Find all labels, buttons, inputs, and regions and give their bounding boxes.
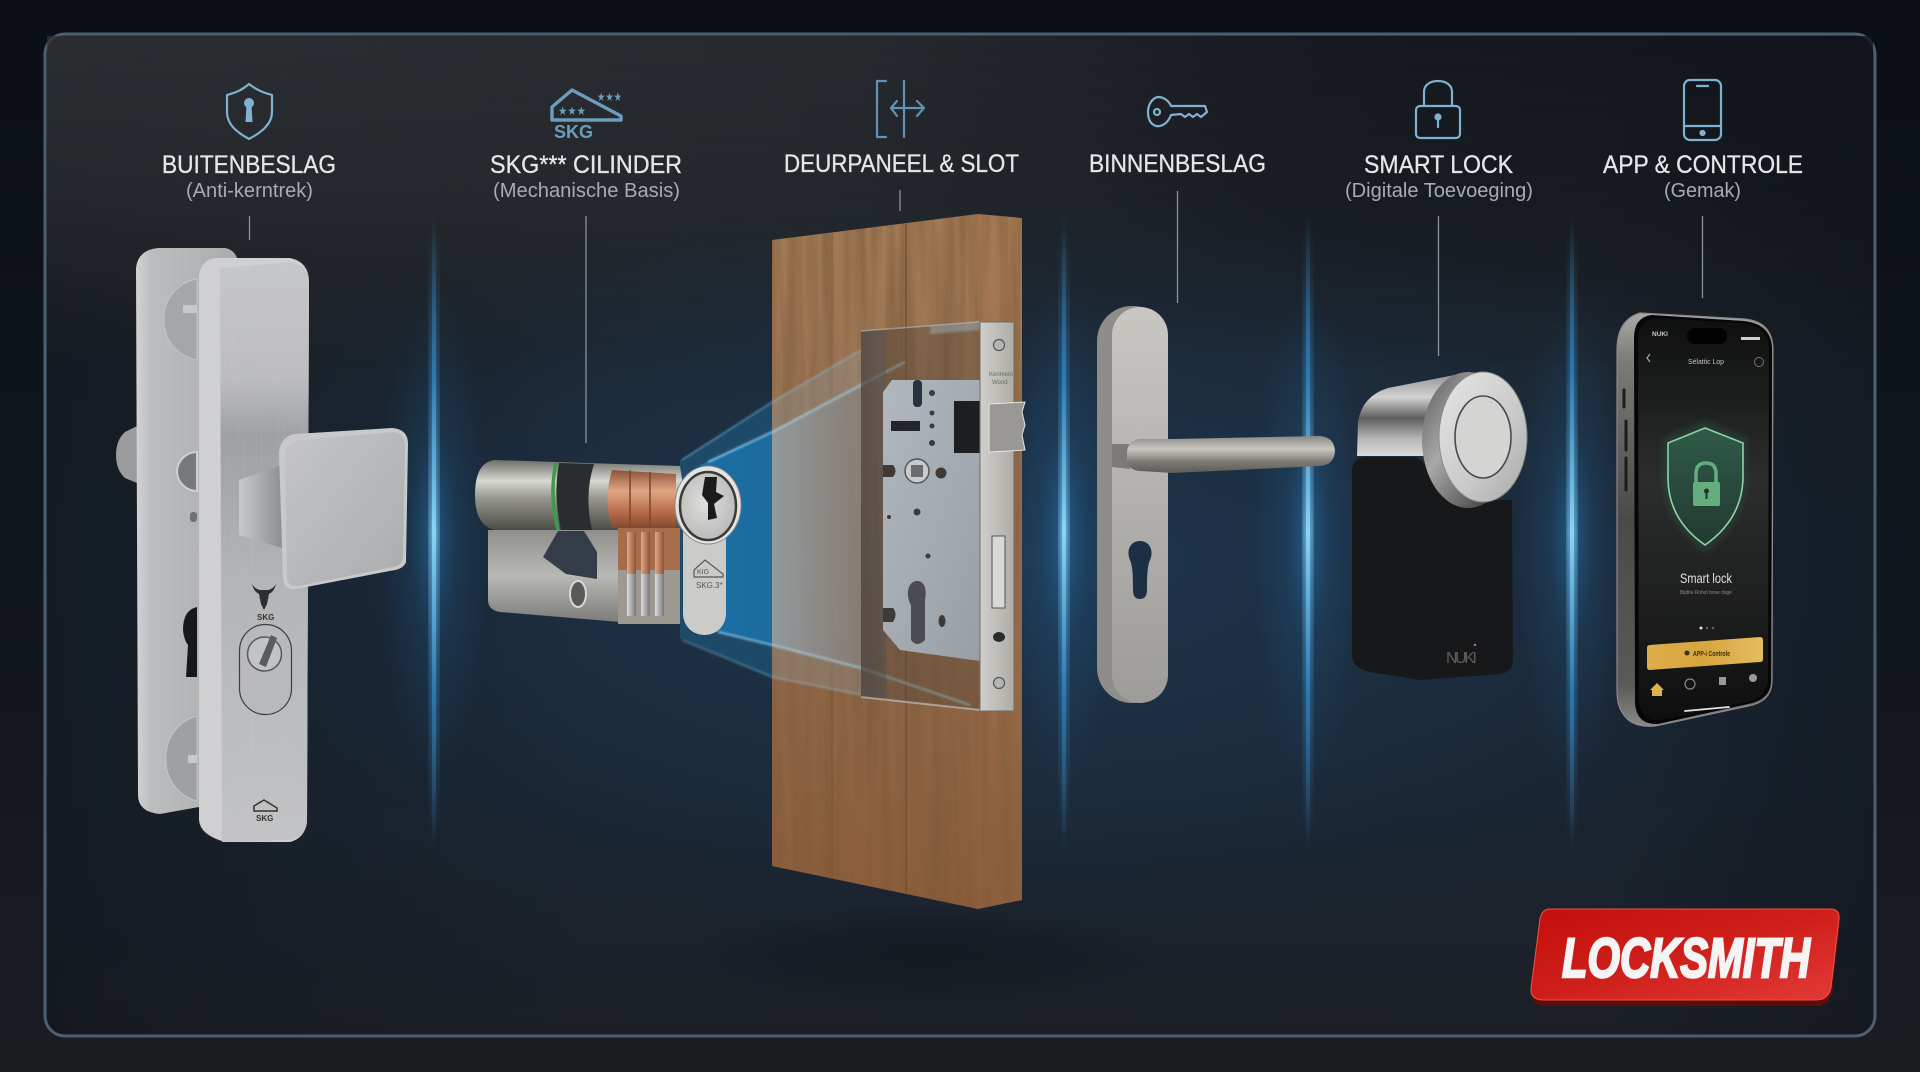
smart lock caption: Bijdite Rohot bove dage: [1680, 590, 1732, 596]
heading: skg cilinder: SKG*** CILINDER: [490, 151, 682, 179]
button: [1455, 396, 1511, 478]
nuki logo: NUKI: [1446, 650, 1477, 667]
bull mark: SKG: [257, 613, 274, 622]
front plate: [199, 258, 309, 842]
screen: [1638, 318, 1769, 720]
leader lines: [250, 190, 1702, 443]
heading: buitenbeslag: BUITENBESLAG: [162, 151, 336, 179]
smart lock: nuki: [1352, 372, 1527, 680]
case cut-outs: [883, 380, 980, 627]
skg logo: SKG: [256, 814, 273, 823]
lever: [1127, 436, 1335, 473]
heading: deurpaneel en slot: DEURPANEEL & SLOT: [784, 150, 1019, 178]
phone body: [1617, 313, 1773, 726]
door side: [978, 214, 1022, 909]
icon: SKG triple star roof: [552, 90, 622, 142]
keyhole: [1128, 541, 1152, 599]
binnenbeslag: interior handle: [1097, 306, 1335, 703]
icon: shield with keyhole: [227, 84, 272, 139]
smart lock caption: [1680, 570, 1733, 630]
heading: binnenbeslag: BINNENBESLAG: [1089, 150, 1266, 178]
skg logo: [254, 800, 277, 823]
escutcheon oval with cylinder cover: [240, 624, 292, 714]
bull mark: [252, 584, 276, 622]
spindle hub: [905, 459, 929, 483]
heading: buitenbeslag: (Anti-kerntrek): [186, 180, 313, 202]
front face: [675, 466, 741, 635]
icon: SKG triple star roof: ★★★: [597, 90, 622, 104]
locksmith badge: LOCKSMITH: [1562, 926, 1811, 989]
bezel: [1634, 315, 1772, 724]
icon: phone: [1684, 80, 1721, 140]
icon: door panel with arrows: [877, 81, 924, 137]
dark band: [556, 463, 594, 530]
heading: smart lock: (Digitale Toevoeging): [1345, 180, 1533, 202]
buitenbeslag: exterior door plate with knob: [116, 248, 408, 842]
front face: KIG: [697, 569, 709, 576]
app phone: [1617, 313, 1773, 726]
faceplate: [980, 322, 1014, 711]
tab bar: [1650, 674, 1757, 711]
green ring: [553, 463, 558, 530]
wood grain: [772, 214, 978, 909]
gold action button: APP-i Controle: [1693, 651, 1730, 658]
screw hole: [570, 581, 586, 607]
door panel: [772, 214, 1022, 909]
app header: Sélattic Lop: [1688, 357, 1724, 366]
status bar: NUKI: [1652, 331, 1668, 338]
floor shadow under door: [690, 905, 1170, 1005]
barrel: [1357, 372, 1480, 456]
heading: app en controle: (Gemak): [1664, 180, 1741, 202]
faceplate: Wood: [992, 380, 1008, 386]
heading: app en controle: APP & CONTROLE: [1603, 151, 1803, 179]
front disc: [1439, 372, 1527, 502]
copper cutaway: [608, 470, 676, 530]
back plate: [136, 248, 238, 814]
icon: SKG triple star roof: ★★★: [558, 104, 586, 118]
skg cylinder cutaway: [475, 460, 741, 635]
app header: [1647, 354, 1764, 366]
locksmith badge: [1531, 909, 1840, 1006]
heading: app en controle: [1603, 151, 1803, 202]
door front: [772, 214, 978, 909]
smart lock caption: Smart lock: [1680, 570, 1733, 586]
icon: padlock: [1416, 81, 1460, 138]
cylinder hole: [908, 581, 926, 644]
pin chamber: [618, 528, 680, 624]
lower housing: [488, 530, 620, 622]
barrel: [475, 460, 690, 530]
lock rods: [880, 467, 898, 622]
icon: SKG triple star roof: SKG: [554, 122, 593, 142]
faceplate: Kenmerk: [989, 372, 1014, 378]
green shield: [1663, 420, 1747, 553]
left spindle stub: [116, 426, 137, 483]
square knob: [279, 428, 408, 589]
side buttons: [1624, 390, 1626, 490]
icon: key: [1148, 97, 1207, 126]
knob neck: [239, 465, 282, 548]
heading: smart lock: SMART LOCK: [1364, 151, 1513, 179]
vertical light dividers: [379, 215, 1627, 850]
cam: [543, 531, 597, 579]
lever base flange: [1112, 444, 1130, 469]
blue projection beam from cylinder to door: [680, 350, 970, 705]
mortise lock: [880, 322, 1025, 711]
front face: SKG.3*: [696, 581, 723, 590]
status bar: [1652, 328, 1760, 344]
heading: buitenbeslag: [162, 151, 336, 202]
latch bolt: [989, 402, 1025, 452]
backplate: [1097, 306, 1168, 703]
body: [1352, 457, 1513, 680]
second ring: [1422, 372, 1514, 508]
heading: smart lock: [1345, 151, 1533, 202]
heading: skg cilinder: [490, 151, 682, 202]
heading: skg cilinder: (Mechanische Basis): [493, 180, 680, 202]
lock case: [883, 380, 980, 661]
gold action button: [1647, 637, 1763, 670]
translucent cutaway window: [861, 322, 980, 710]
